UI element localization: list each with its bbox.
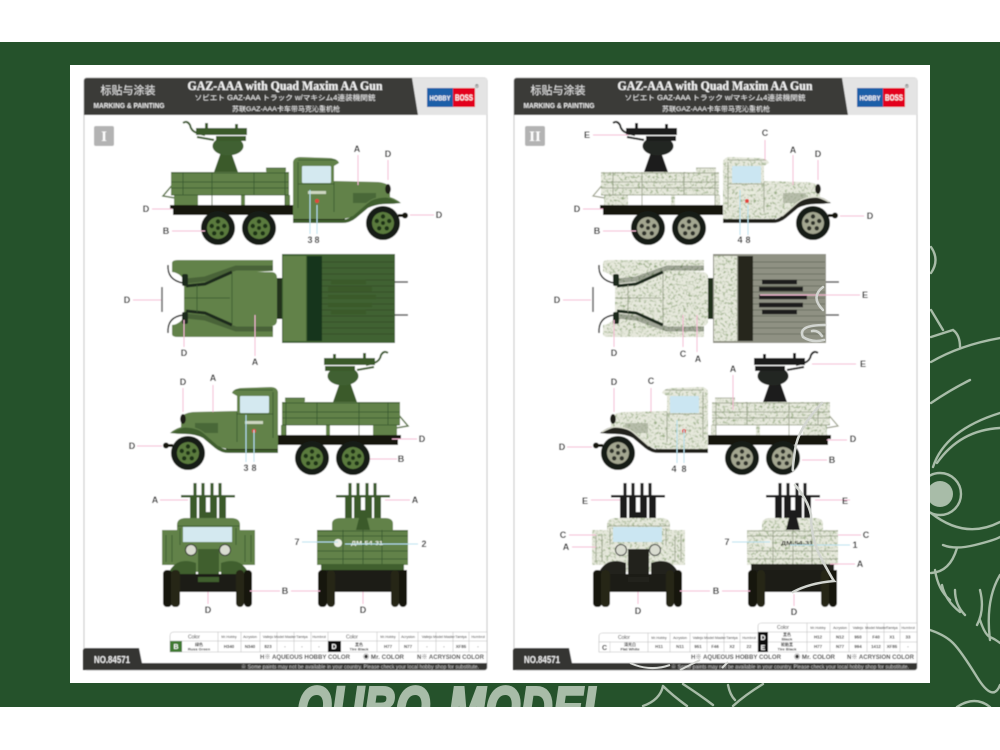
colour table I: - bbox=[301, 644, 303, 649]
badge: scheme II bbox=[525, 126, 545, 146]
colour table I: D bbox=[331, 644, 337, 651]
header band I bbox=[84, 78, 487, 115]
callouts: scheme II colour labels: E bbox=[584, 130, 590, 140]
callouts: scheme I colour labels: D bbox=[129, 441, 136, 451]
logo: Hobby Boss II: HOBBY bbox=[860, 94, 880, 102]
colour table I: - bbox=[443, 644, 445, 649]
callouts: scheme I colour labels: 2 bbox=[421, 539, 427, 549]
legend: paint brands I: ◉ Mr. COLOR bbox=[363, 654, 405, 661]
colour table II: Flat White bbox=[620, 646, 640, 652]
callouts: scheme II colour labels: D bbox=[867, 211, 874, 221]
truck: green rear view: ДМ-54-31 bbox=[351, 541, 383, 547]
callouts: scheme I colour labels: B bbox=[282, 586, 289, 596]
colour table I: H77 bbox=[384, 644, 393, 649]
colour table II: Color bbox=[777, 625, 789, 631]
logo: Hobby Boss II: ® bbox=[905, 83, 909, 90]
colour table II: Mr.Hobby bbox=[651, 636, 667, 640]
callouts: scheme I colour labels: D bbox=[419, 434, 426, 444]
callouts: scheme II colour labels: E bbox=[842, 496, 848, 506]
colour table II: X2 bbox=[729, 644, 735, 649]
callouts: scheme II colour labels: C bbox=[560, 530, 567, 540]
colour table II: F46 bbox=[711, 644, 719, 649]
colour table I: - bbox=[318, 644, 320, 649]
footer band I: ※ Some paints may not be available in your country. Please check your local hobby shop for substitute. bbox=[241, 664, 479, 670]
watermark: dragon strokes over the sheet bbox=[630, 287, 834, 670]
footer band I: NO.84571 bbox=[94, 655, 130, 666]
callouts: scheme I colour labels: D bbox=[180, 377, 187, 387]
colour table I bbox=[170, 632, 487, 652]
callouts: scheme II colour labels: D bbox=[554, 295, 561, 305]
legend: paint brands II: N※ ACRYSION COLOR bbox=[847, 654, 915, 661]
colour table I: Humbrol bbox=[312, 635, 326, 639]
colour table I: Acrysion bbox=[243, 635, 257, 639]
callouts: scheme II colour labels: C bbox=[863, 530, 870, 540]
callouts: scheme II colour labels: B bbox=[594, 226, 601, 236]
colour table I: Acrysion bbox=[401, 635, 415, 639]
white instruction sheet bbox=[70, 65, 930, 683]
colour table II: 22 bbox=[747, 644, 752, 649]
colour table I: 823 bbox=[264, 644, 272, 649]
callouts: scheme I colour labels: A bbox=[152, 495, 159, 505]
callouts: scheme II colour labels: C bbox=[762, 128, 769, 138]
colour table II: 黑色 bbox=[783, 631, 791, 637]
colour table I: Tamiya bbox=[296, 635, 308, 639]
heading: marking and painting II bbox=[524, 83, 595, 110]
colour table II: 消光白 bbox=[624, 641, 636, 647]
colour table II: E bbox=[761, 645, 766, 652]
colour table II: Model Master bbox=[704, 636, 727, 640]
colour table II: 1412 bbox=[871, 644, 881, 649]
colour table II: 33 bbox=[906, 634, 911, 640]
callouts: scheme II colour labels: D bbox=[559, 442, 566, 452]
callouts: scheme I colour labels: 7 bbox=[294, 537, 300, 547]
footer band I bbox=[83, 648, 487, 670]
colour table I: Humbrol bbox=[471, 635, 485, 639]
callouts: scheme II colour labels: D bbox=[574, 204, 581, 214]
callouts: scheme II colour labels: 1 bbox=[852, 540, 858, 550]
callouts: scheme I colour labels: D bbox=[385, 149, 392, 159]
callouts: scheme II colour labels: B bbox=[829, 455, 836, 465]
colour table I: Color bbox=[188, 634, 200, 640]
callouts: scheme I colour labels: D bbox=[143, 204, 150, 214]
colour table I: Russ Green bbox=[188, 646, 211, 652]
colour table II: Mr.Hobby bbox=[810, 626, 826, 630]
callouts: scheme II colour labels bbox=[554, 128, 874, 617]
truck: winter camo right side view bbox=[593, 122, 838, 245]
colour table I: Mr.Hobby bbox=[221, 635, 237, 639]
heading: marking and painting I: 标贴与涂装 bbox=[100, 83, 156, 97]
callouts: scheme II colour labels: 8 bbox=[681, 464, 687, 474]
callouts: scheme I colour labels: D bbox=[436, 210, 443, 220]
callouts: scheme II colour labels: E bbox=[582, 496, 588, 506]
legend: paint brands I: N※ ACRYSION COLOR bbox=[417, 654, 485, 661]
colour table I: Color bbox=[346, 634, 358, 640]
colour table II: XF85 bbox=[887, 644, 898, 649]
colour table I: H340 bbox=[224, 644, 235, 649]
colour table I: - bbox=[284, 644, 286, 649]
callouts: scheme I colour labels: B bbox=[163, 226, 170, 236]
truck: green top view bbox=[162, 254, 408, 343]
truck: green rear view bbox=[317, 483, 408, 607]
callouts: scheme I colour labels: D bbox=[205, 605, 212, 615]
colour table I: Tamiya bbox=[455, 635, 467, 639]
callouts: scheme II colour labels: E bbox=[862, 290, 868, 300]
colour table II: Model Master bbox=[865, 626, 888, 630]
colour table II: D bbox=[760, 635, 766, 642]
callouts: scheme I colour labels: D bbox=[360, 605, 367, 615]
callouts: scheme II colour labels: A bbox=[730, 364, 737, 374]
callouts: scheme I colour labels: A bbox=[252, 357, 259, 367]
callouts: scheme I colour labels: D bbox=[181, 348, 188, 358]
colour table I: 黑色 bbox=[355, 641, 363, 647]
truck: winter camo rear view: ДМ-54-31 bbox=[781, 541, 813, 547]
badge: scheme I bbox=[94, 126, 114, 146]
colour table I: - bbox=[426, 644, 428, 649]
colour table I: Model Master bbox=[274, 635, 297, 639]
colour table II: Tire Black bbox=[777, 646, 797, 652]
legend: paint brands II: H※ AQUEOUS HOBBY COLOR bbox=[691, 654, 782, 661]
colour table I: Tire Black bbox=[349, 646, 369, 652]
callouts: scheme II colour labels: C bbox=[648, 376, 655, 386]
callouts: scheme I colour labels: 3 bbox=[243, 463, 249, 473]
footer band II: ※ Some paints may not be available in your country. Please check your local hobby shop for substitute. bbox=[671, 664, 909, 670]
colour table II: F40 bbox=[872, 634, 880, 640]
colour table II: H77 bbox=[814, 644, 823, 649]
colour table II: Humbrol bbox=[901, 626, 915, 630]
colour table I: Vallejo bbox=[422, 635, 432, 639]
callouts: scheme I colour labels: 3 bbox=[307, 235, 313, 245]
heading: marking and painting I bbox=[94, 83, 165, 110]
callouts: scheme I colour labels bbox=[124, 144, 443, 615]
legend: paint brands II bbox=[691, 654, 915, 661]
logo: Hobby Boss I: BOSS bbox=[455, 94, 474, 102]
callouts: scheme II colour labels: D bbox=[635, 606, 642, 616]
callouts: scheme II colour labels: D bbox=[611, 377, 618, 387]
title I: GAZ-AAA with Quad Maxim AA Gun bbox=[188, 78, 383, 93]
colour table II: N77 bbox=[836, 644, 845, 649]
heading: marking and painting I: MARKING & PAINTING bbox=[94, 101, 165, 110]
colour table I: - bbox=[477, 644, 479, 649]
colour table II: 994 bbox=[854, 644, 862, 649]
watermark: dragon line art on green margin bbox=[930, 246, 1000, 707]
callouts: scheme I colour labels: D bbox=[124, 295, 131, 305]
colour table II: Vallejo bbox=[853, 626, 863, 630]
watermark: brand lettering below the sheet: MODEL bbox=[448, 675, 610, 742]
colour table I: Model Master bbox=[433, 635, 456, 639]
callouts: scheme I colour labels: 8 bbox=[314, 235, 320, 245]
colour table I: B bbox=[173, 644, 179, 651]
callouts: scheme II colour labels: D bbox=[791, 607, 798, 617]
heading: marking and painting II: MARKING & PAINTING bbox=[524, 101, 595, 110]
colour table II: 轮胎黑 bbox=[781, 641, 793, 647]
colour table II: Black bbox=[782, 636, 793, 642]
truck: winter camo left side view bbox=[593, 352, 838, 475]
logo: Hobby Boss II: BOSS bbox=[885, 94, 904, 102]
title II: ソビエト GAZ-AAA トラック w/マキシム4連装機関銃 bbox=[624, 93, 806, 102]
truck: winter camo front view bbox=[592, 483, 685, 607]
footer band II: NO.84571 bbox=[524, 655, 560, 666]
badge: scheme II: II bbox=[529, 129, 541, 145]
logo: Hobby Boss I bbox=[427, 83, 479, 107]
legend: paint brands II: ◉ Mr. COLOR bbox=[794, 654, 836, 661]
colour table II: Color bbox=[618, 635, 630, 641]
truck: winter camo top view bbox=[593, 254, 839, 343]
watermark: leaf strokes on bottom band bbox=[643, 684, 763, 706]
colour table I: XF85 bbox=[456, 644, 467, 649]
colour table II: Tamiya bbox=[726, 636, 738, 640]
callouts: scheme II colour labels: E bbox=[860, 359, 866, 369]
truck: green right side view bbox=[163, 122, 408, 245]
callouts: scheme II colour labels: A bbox=[563, 542, 570, 552]
title I: ソビエト GAZ-AAA トラック w/マキシム4連装機関銃 bbox=[194, 93, 376, 102]
colour table II: Vallejo bbox=[693, 636, 703, 640]
colour table II: Acrysion bbox=[833, 626, 847, 630]
truck: green left side view bbox=[163, 352, 408, 475]
callouts: scheme II colour labels: 4 bbox=[737, 235, 743, 245]
panel: scheme I instruction page bbox=[83, 78, 487, 670]
title II: 苏联GAZ-AAA卡车带马克沁重机枪 bbox=[662, 104, 771, 113]
callouts: scheme I colour labels: 8 bbox=[251, 463, 257, 473]
heading: marking and painting II: 标贴与涂装 bbox=[530, 83, 586, 97]
callouts: scheme II colour labels: D bbox=[815, 149, 822, 159]
callouts: scheme I colour labels: A bbox=[354, 144, 361, 154]
title I: 苏联GAZ-AAA卡车带马克沁重机枪 bbox=[232, 104, 341, 113]
title II bbox=[618, 78, 813, 113]
colour table I: Vallejo bbox=[263, 635, 273, 639]
callouts: scheme II colour labels: B bbox=[713, 586, 720, 596]
colour table II: Tamiya bbox=[886, 626, 898, 630]
callouts: scheme II colour labels: A bbox=[857, 559, 864, 569]
logo: Hobby Boss II bbox=[857, 83, 909, 107]
colour table II: C bbox=[602, 645, 607, 652]
callouts: scheme II colour labels: C bbox=[680, 349, 687, 359]
callouts: scheme II colour labels: 7 bbox=[724, 537, 730, 547]
title I bbox=[188, 78, 383, 113]
truck: green front view bbox=[162, 483, 255, 607]
watermark: brand lettering below the sheet: OUBO bbox=[297, 675, 430, 742]
colour table II: H11 bbox=[655, 644, 663, 649]
footer band II bbox=[513, 648, 917, 670]
logo: Hobby Boss I: HOBBY bbox=[430, 94, 450, 102]
logo: Hobby Boss I: ® bbox=[475, 83, 479, 90]
header band II bbox=[514, 78, 917, 115]
colour table II: X1 bbox=[889, 634, 895, 640]
legend: paint brands I bbox=[260, 654, 485, 661]
colour table II: H12 bbox=[814, 634, 823, 640]
callouts: scheme I colour labels: B bbox=[398, 454, 405, 464]
truck: winter camo rear view bbox=[747, 483, 838, 607]
colour table II: Humbrol bbox=[742, 636, 756, 640]
colour table II: Acrysion bbox=[673, 636, 687, 640]
callouts: scheme II colour labels: D bbox=[850, 434, 857, 444]
colour table I: N77 bbox=[404, 644, 413, 649]
colour table I: 绿色 bbox=[195, 641, 203, 647]
panel outline I bbox=[84, 78, 487, 670]
watermark: brand lettering below the sheet bbox=[298, 685, 598, 707]
callouts: scheme I colour labels: A bbox=[210, 373, 217, 383]
colour table II: N11 bbox=[676, 644, 684, 649]
title II: GAZ-AAA with Quad Maxim AA Gun bbox=[618, 78, 813, 93]
colour table II bbox=[599, 623, 917, 652]
colour table II: N12 bbox=[836, 634, 845, 640]
panel: scheme II instruction page bbox=[513, 78, 917, 670]
callouts: scheme II colour labels: D bbox=[611, 348, 618, 358]
legend: paint brands I: H※ AQUEOUS HOBBY COLOR bbox=[260, 654, 351, 661]
callouts: scheme II colour labels: A bbox=[790, 145, 797, 155]
callouts: scheme I colour labels: A bbox=[412, 495, 419, 505]
callouts: scheme II colour labels: 4 bbox=[671, 464, 677, 474]
colour table I: Mr.Hobby bbox=[380, 635, 396, 639]
colour table I: N340 bbox=[245, 644, 256, 649]
colour table II: - bbox=[907, 644, 909, 649]
callouts: scheme II colour labels: 8 bbox=[745, 235, 751, 245]
colour table II: 950 bbox=[854, 634, 862, 640]
colour table II: 951 bbox=[694, 644, 702, 649]
panel outline II bbox=[514, 78, 917, 670]
callouts: scheme II colour labels: A bbox=[695, 354, 702, 364]
badge: scheme I: I bbox=[101, 129, 107, 145]
